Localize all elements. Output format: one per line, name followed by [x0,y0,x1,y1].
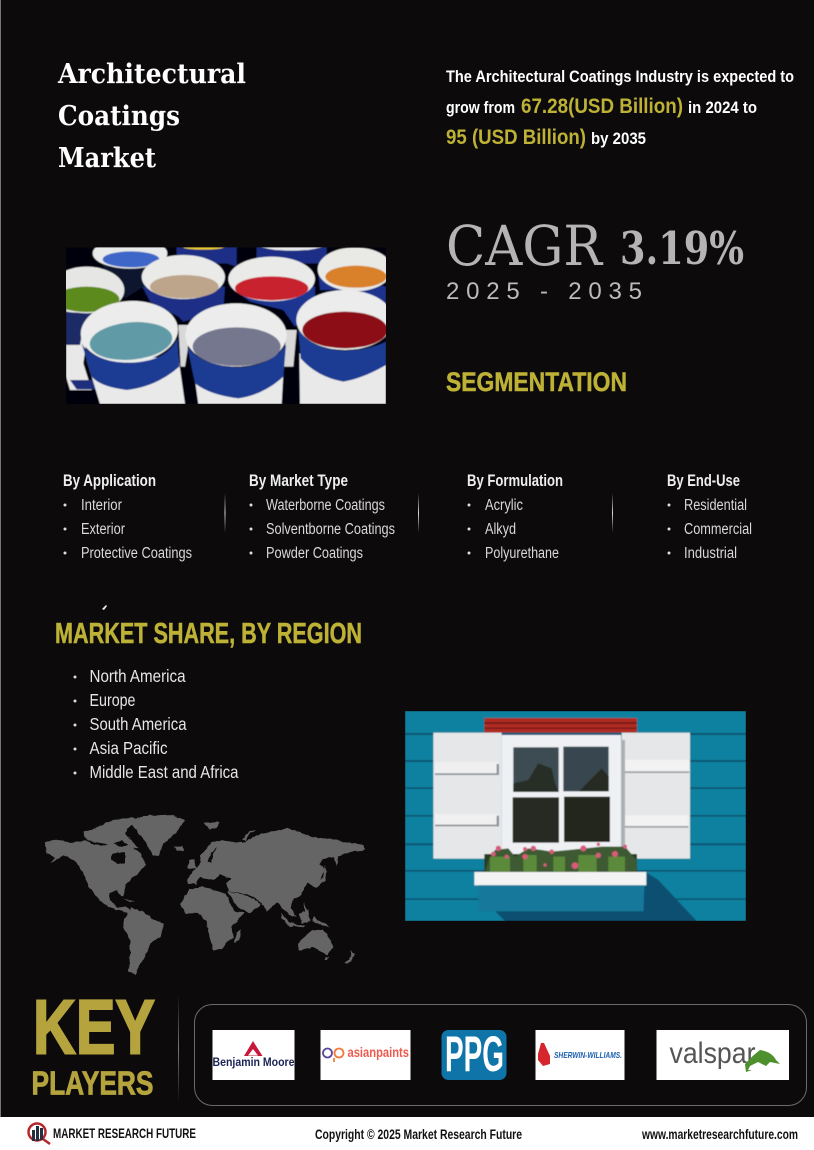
segment: by end-use: Commercial [684,521,752,538]
segment: by formulation: By Formulation [467,472,563,490]
market forecast text: grow from [446,99,515,117]
segment: by market type [249,472,395,562]
world map [45,815,365,975]
logo: Sherwin-Williams [536,1030,624,1080]
logo: Asian Paints: asianpaints [348,1045,409,1060]
segment: by application: Interior [81,497,122,514]
market forecast text: in 2024 to [688,99,757,117]
region list [74,666,239,782]
key players heading [32,984,155,1102]
logo: Valspar: valspar [670,1037,756,1070]
logo: Sherwin-Williams: SHERWIN-WILLIAMS. [554,1050,622,1060]
footer brand: MARKET RESEARCH FUTURE [53,1125,196,1141]
segment: by market type: Solventborne Coatings [266,521,395,538]
logo: PPG: PPG [445,1026,504,1082]
market share heading: MARKET SHARE, BY REGION [55,618,362,650]
copyright: Copyright © 2025 Market Research Future [315,1127,522,1142]
segment: by end-use: Residential [684,497,747,514]
market forecast text: 67.28(USD Billion) [521,95,683,118]
segment: by application: By Application [63,472,156,490]
market forecast text: by 2035 [591,130,646,148]
segment: by formulation: Acrylic [485,497,523,514]
segment: by application [63,472,192,562]
segmentation heading: SEGMENTATION [446,367,627,397]
segment: by market type: Waterborne Coatings [266,497,385,514]
segment: by application: Exterior [81,521,125,538]
segment: by end-use: Industrial [684,545,737,562]
title: Market [58,143,156,174]
logo: Valspar [656,1030,789,1080]
logo: PPG [442,1026,506,1082]
segment: by market type: By Market Type [249,472,348,490]
logo: Benjamin Moore [212,1030,294,1080]
CAGR: CAGR [446,214,603,278]
front buckets [87,357,185,404]
photo: blue wall and window [405,711,746,921]
footer [0,1117,814,1150]
key players panel [194,1004,806,1106]
key players heading: PLAYERS [32,1064,154,1102]
region list: North America [90,666,186,686]
region list: South America [90,714,187,734]
segment: by end-use: By End-Use [667,472,740,490]
photo: paint buckets [66,247,386,404]
segment: by formulation [467,472,563,562]
market forecast text [446,68,794,149]
logo: Benjamin Moore: Benjamin Moore [212,1057,294,1069]
segment: by market type: Powder Coatings [266,545,363,562]
region list: Europe [90,690,136,710]
footer logo icon [28,1124,50,1144]
title [57,59,246,174]
segment: by application: Protective Coatings [81,545,192,562]
logo: Asian Paints [320,1030,410,1080]
CAGR [446,214,744,305]
region list: Middle East and Africa [90,762,239,782]
region list: Asia Pacific [90,738,168,758]
title: Coatings [58,101,180,132]
segment: by formulation: Alkyd [485,521,516,538]
title: Architectural [57,59,246,90]
CAGR: 2025 - 2035 [446,278,642,305]
CAGR: 3.19% [620,222,744,275]
market forecast text: 95 (USD Billion) [446,126,586,149]
key players heading: KEY [33,984,155,1070]
segment: by end-use [667,472,752,562]
segment: by formulation: Polyurethane [485,545,559,562]
